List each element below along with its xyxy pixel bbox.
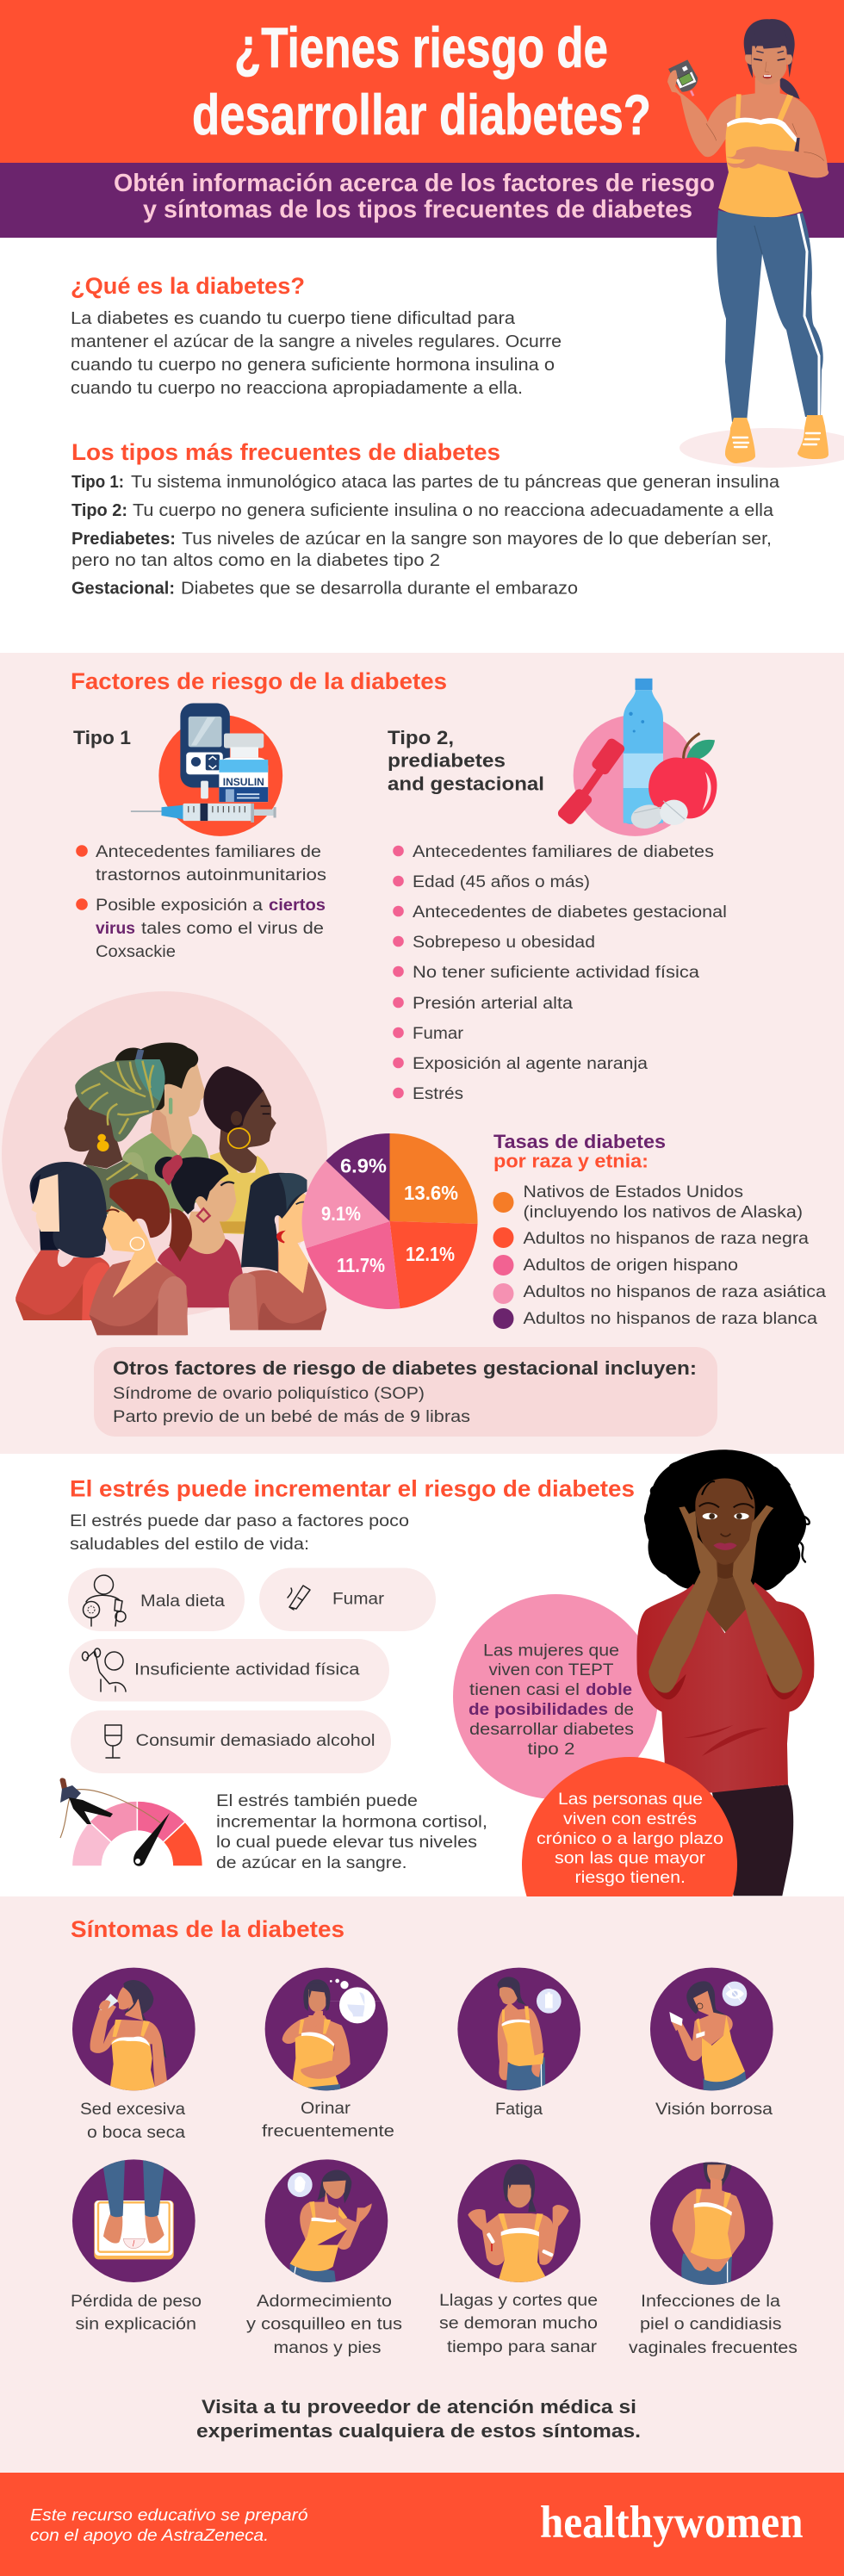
label: blurred vision: Visión borrosa [655, 2101, 773, 2119]
header band [0, 0, 844, 163]
text: tipos: Diabetes que se desarrolla durante el embarazo [181, 579, 578, 598]
upper body [667, 19, 828, 218]
subtitle [114, 170, 715, 224]
bubble: TEPT text: desarrollar diabetes [469, 1721, 634, 1739]
logo: healthywomen: healthywomen [540, 2498, 803, 2548]
label: numbness: manos y pies [274, 2339, 381, 2357]
bubble: TEPT text: Las mujeres que [483, 1642, 619, 1660]
subtitle band [0, 163, 844, 238]
text: tipos: Prediabetes: [71, 530, 176, 549]
list: tipo 2 factors: Antecedentes de diabetes gestacional [413, 903, 727, 922]
woman with long hair right [228, 1173, 326, 1330]
legend [493, 1183, 826, 1329]
heading: tipo 2: and gestacional [388, 773, 544, 795]
text: stress intro [70, 1512, 409, 1554]
label: weight loss: Pérdida de peso [71, 2293, 202, 2311]
bubble: TEPT text: tienen casi el [469, 1681, 580, 1699]
label: numbness [246, 2293, 402, 2357]
text: tipos [71, 473, 780, 598]
footer text [30, 2506, 308, 2545]
label: weight loss [71, 2293, 202, 2334]
bubble: chronic stress: Las personas que [558, 1791, 703, 1809]
pie chart: diabetes rates [302, 1133, 478, 1309]
bubble: chronic stress: son las que mayor [555, 1850, 706, 1867]
bubble: TEPT text: viven con TEPT [489, 1661, 614, 1679]
list: tipo 2 factors: No tener suficiente actividad física [413, 964, 699, 982]
list: tipo 2 factors: Fumar [413, 1025, 464, 1043]
heading: tipo 2: prediabetes [388, 750, 506, 772]
shoes [725, 418, 755, 463]
pill: actividad fisica [69, 1639, 389, 1702]
text: que es la diabetes: cuando tu cuerpo no genera suficiente hormona insulina o [71, 356, 555, 375]
title: desarrollar diabetes? [192, 83, 651, 146]
label: infections [629, 2293, 797, 2357]
pie chart: diabetes rates: 6.9% [340, 1154, 387, 1176]
text: que es la diabetes [71, 309, 562, 398]
woman with curly hair [115, 1042, 220, 1217]
illustration: woman with glucose meter [667, 19, 844, 468]
label: weight loss: sin explicación [76, 2315, 196, 2334]
call to action [196, 2396, 641, 2442]
pill: mala dieta [68, 1567, 245, 1631]
symptom: frequent urination [265, 1968, 388, 2093]
bubble: chronic stress: viven con estrés [563, 1810, 697, 1828]
symptom: slow healing [457, 2159, 580, 2282]
label: fatigue: Fatiga [495, 2101, 543, 2119]
legend: Nativos de Estados Unidos [524, 1183, 743, 1201]
list: tipo 2 factors: Sobrepeso u obesidad [413, 934, 595, 952]
list: tipo 2 factors: Edad (45 años o más) [413, 873, 590, 891]
pie chart: diabetes rates: 12.1% [406, 1243, 455, 1265]
list: tipo 2 factors: Presión arterial alta [413, 995, 573, 1013]
text: tipos: pero no tan altos como en la diabetes tipo 2 [71, 551, 440, 570]
icon: lifestyle [556, 679, 717, 836]
heading: tipo 1: Tipo 1 [73, 727, 131, 748]
illustration: stressed woman [636, 1449, 814, 1896]
legend: Adultos no hispanos de raza negra [524, 1230, 809, 1248]
label: thirst: Sed excesiva [80, 2101, 185, 2119]
text: tipos: Tu cuerpo no genera suficiente insulina o no reacciona adecuadamente a ella [133, 501, 774, 520]
illustration: group of women [2, 991, 327, 1335]
heading: tipos: Los tipos más frecuentes de diabetes [71, 439, 500, 465]
text: cortisol: incrementar la hormona cortisol, [216, 1814, 487, 1831]
bubble: chronic stress [522, 1757, 737, 1896]
label: frequent urination: frecuentemente [262, 2122, 394, 2141]
subtitle: Obtén información acerca de los factores de riesgo [114, 170, 715, 197]
pie chart: diabetes rates: 11.7% [337, 1254, 385, 1276]
callout: gestational factors: Otros factores de riesgo de diabetes gestacional incluyen: [113, 1357, 697, 1379]
list: tipo 2 factors: Exposición al agente naranja [413, 1055, 648, 1073]
footer text: con el apoyo de AstraZeneca. [30, 2527, 269, 2545]
woman with white hoop [90, 1179, 188, 1335]
legend: Adultos no hispanos de raza blanca [524, 1310, 817, 1328]
text: cortisol: de azúcar en la sangre. [216, 1854, 406, 1872]
text: stress intro: saludables del estilo de vida: [70, 1536, 309, 1554]
list: tipo 2 factors: Estrés [413, 1085, 463, 1103]
label: slow healing [439, 2292, 598, 2356]
label: infections: piel o candidiasis [640, 2315, 782, 2334]
legs [717, 210, 823, 422]
heading: stress: El estrés puede incrementar el riesgo de diabetes [70, 1476, 635, 1502]
pill: fumar: Fumar [332, 1590, 385, 1609]
text: tipos: Tipo 2: [71, 501, 127, 520]
pill: alcohol: Consumir demasiado alcohol [136, 1732, 375, 1750]
label: infections: Infecciones de la [641, 2293, 780, 2311]
list: tipo 2 factors [393, 843, 727, 1103]
label: thirst [80, 2101, 185, 2142]
label: slow healing: Llagas y cortes que [439, 2292, 598, 2310]
heading: tipo 2: Tipo 2, [388, 727, 454, 748]
call to action: experimentas cualquiera de estos síntomas. [196, 2420, 641, 2442]
list: tipo 1 factors: ciertos [269, 897, 326, 915]
label: frequent urination: Orinar [301, 2100, 351, 2118]
bubble: TEPT background [453, 1594, 658, 1799]
bubble: TEPT text: de [614, 1701, 634, 1719]
text: que es la diabetes: La diabetes es cuando tu cuerpo tiene dificultad para [71, 309, 516, 328]
title: ¿Tienes riesgo de [234, 16, 608, 79]
heading: pie legend [493, 1131, 666, 1171]
list: tipo 1 factors: tales como el virus de [141, 920, 324, 938]
heading: risk factors: Factores de riesgo de la diabetes [71, 668, 447, 694]
list: tipo 1 factors: Coxsackie [96, 943, 176, 961]
list: tipo 1 factors: Posible exposición a [96, 897, 263, 915]
label: thirst: o boca seca [87, 2124, 185, 2142]
text: tipos: Tipo 1: [71, 473, 124, 492]
text: cortisol [216, 1792, 487, 1872]
bubble: TEPT text [469, 1642, 634, 1759]
bubble: chronic stress: riesgo tienen. [575, 1869, 686, 1887]
symptom: numbness [265, 2159, 388, 2282]
bubble: TEPT text: doble [586, 1681, 632, 1699]
callout: gestational factors: Parto previo de un bebé de más de 9 libras [113, 1408, 470, 1426]
bubble: TEPT text: de posibilidades [469, 1701, 608, 1719]
icon: cortisol gauge [60, 1778, 202, 1866]
heading: pie legend: Tasas de diabetes [493, 1131, 666, 1152]
pie chart: diabetes rates: 13.6% [404, 1182, 458, 1204]
pill: actividad fisica: Insuficiente actividad física [134, 1660, 360, 1679]
legend: Adultos no hispanos de raza asiática [524, 1283, 826, 1301]
label: slow healing: tiempo para sanar [447, 2338, 598, 2356]
text: que es la diabetes: cuando tu cuerpo no reacciona apropiadamente a ella. [71, 379, 523, 398]
text: cortisol: lo cual puede elevar tus niveles [216, 1834, 477, 1852]
pill: alcohol [71, 1710, 391, 1773]
text: stress intro: El estrés puede dar paso a factores poco [70, 1512, 409, 1530]
heading: tipo 2 [388, 727, 544, 795]
heading: pie legend: por raza y etnia: [493, 1151, 649, 1171]
label: slow healing: se demoran mucho [439, 2315, 598, 2332]
heading: symptoms: Síntomas de la diabetes [71, 1916, 344, 1942]
label: numbness: Adormecimiento [257, 2293, 392, 2311]
woman with bun [155, 1155, 243, 1307]
text: tipos: Tu sistema inmunológico ataca las partes de tu páncreas que generan insulina [131, 473, 780, 492]
call to action: Visita a tu proveedor de atención médica si [202, 2396, 636, 2418]
pill: fumar [259, 1567, 436, 1631]
label: frequent urination [262, 2100, 394, 2141]
list: tipo 1 factors: trastornos autoinmunitarios [96, 866, 326, 885]
woman with long hair and red top [16, 1162, 110, 1320]
symptom: fatigue [457, 1968, 580, 2090]
text: que es la diabetes: mantener el azúcar de la sangre a niveles regulares. Ocurre [71, 332, 562, 351]
symptom: thirst [72, 1968, 195, 2093]
icon: insulin kit [131, 704, 282, 836]
text: cortisol: El estrés también puede [216, 1792, 418, 1810]
legend: (incluyendo los nativos de Alaska) [524, 1204, 803, 1222]
symptom: blurred vision [650, 1968, 773, 2091]
woman with turban [65, 1059, 165, 1214]
footer band [0, 2473, 844, 2576]
list: tipo 1 factors [76, 843, 326, 961]
callout: gestational factors: Síndrome de ovario poliquístico (SOP) [113, 1385, 425, 1403]
icon: insulin kit: INSULIN [223, 776, 264, 788]
heading: que es la diabetes: ¿Qué es la diabetes? [71, 273, 305, 299]
footer text: Este recurso educativo se preparó [30, 2506, 308, 2525]
title [192, 16, 651, 146]
woman with yellow top [203, 1066, 276, 1234]
label: infections: vaginales frecuentes [629, 2339, 797, 2357]
panel: risk factors [0, 653, 844, 1454]
bubble: chronic stress: crónico o a largo plazo [537, 1830, 723, 1848]
panel: symptoms [0, 1896, 844, 2473]
pill: mala dieta: Mala dieta [140, 1592, 225, 1611]
symptom: weight loss [72, 2159, 195, 2282]
text: tipos: Gestacional: [71, 579, 175, 598]
list: tipo 2 factors: Antecedentes familiares de diabetes [413, 843, 714, 861]
symptom: infections [650, 2162, 773, 2288]
bubble: TEPT text: tipo 2 [527, 1741, 575, 1759]
pie chart: diabetes rates: 9.1% [321, 1202, 361, 1225]
list: tipo 1 factors: virus [96, 920, 135, 938]
callout: gestational factors [94, 1347, 717, 1437]
legend: Adultos de origen hispano [524, 1257, 738, 1275]
list: tipo 1 factors: Antecedentes familiares de [96, 843, 321, 861]
label: numbness: y cosquilleo en tus [246, 2315, 402, 2334]
subtitle: y síntomas de los tipos frecuentes de diabetes [143, 196, 692, 224]
text: tipos: Tus niveles de azúcar en la sangre son mayores de lo que deberían ser, [182, 530, 772, 549]
